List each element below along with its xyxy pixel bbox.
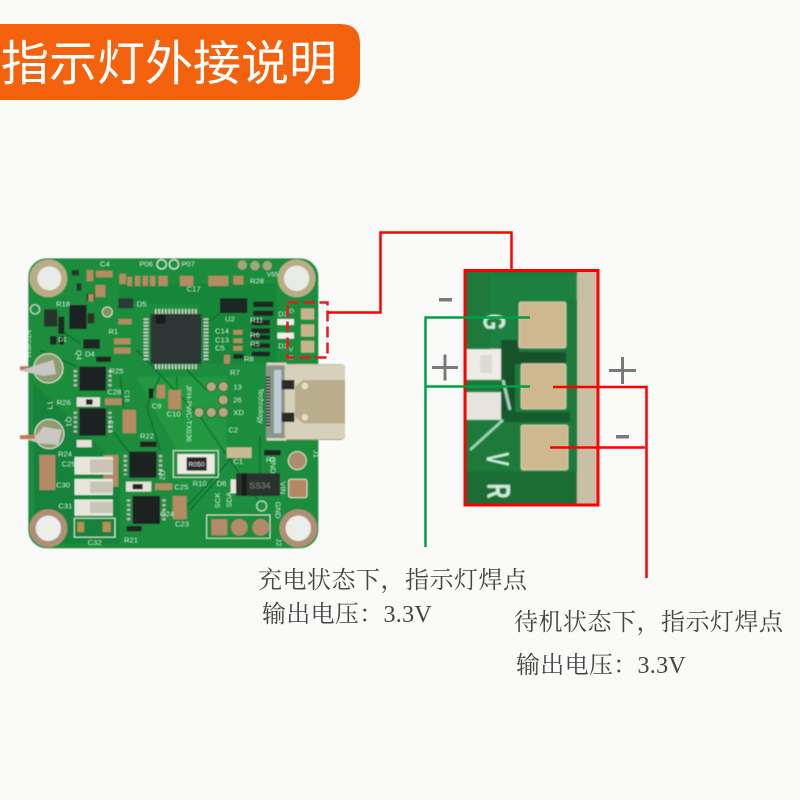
silkscreen labels: C31 xyxy=(58,501,72,510)
silkscreen labels xyxy=(25,260,320,547)
silkscreen labels: D2 xyxy=(278,341,288,350)
silkscreen labels: R6 xyxy=(250,330,260,339)
red standby leader lines xyxy=(550,387,646,578)
title banner xyxy=(0,24,360,100)
silkscreen labels: C10 xyxy=(167,410,181,419)
resistors xyxy=(77,397,151,492)
silkscreen labels: SCK xyxy=(213,492,222,508)
silkscreen labels: C24 xyxy=(160,510,175,519)
silkscreen labels: C4 xyxy=(100,260,111,269)
polarity minus left xyxy=(439,298,452,302)
caption: charging state xyxy=(258,567,528,628)
dashed selection box xyxy=(288,302,328,358)
main MCU chip xyxy=(151,314,201,364)
silkscreen labels: C23 xyxy=(175,520,189,529)
title banner: 指示灯外接说明 xyxy=(1,38,337,91)
red connector to detail xyxy=(328,232,512,312)
silkscreen labels: NTCIR34 xyxy=(25,330,32,358)
inductor pads xyxy=(34,354,63,383)
silkscreen labels: D4 xyxy=(85,350,96,359)
capacitor pads lower left xyxy=(39,455,55,490)
polarity plus left xyxy=(432,354,458,380)
silkscreen labels: D6 xyxy=(217,479,226,488)
USB Type-C connector xyxy=(267,364,345,440)
silkscreen labels: J1 xyxy=(311,450,320,458)
silkscreen labels: C16 xyxy=(123,390,130,402)
silkscreen labels: C25 xyxy=(174,482,188,491)
silkscreen labels: XD xyxy=(233,408,244,417)
silkscreen labels: Technology xyxy=(256,388,263,424)
through-hole pads xyxy=(194,382,228,417)
polarity minus right xyxy=(616,435,629,438)
silkscreen labels: R21 xyxy=(124,536,138,545)
silkscreen labels: C28 xyxy=(107,388,121,397)
silkscreen labels: R26 xyxy=(57,398,71,407)
solder pad: G xyxy=(519,302,566,348)
silkscreen labels: R1 xyxy=(266,455,276,464)
caption: standby state xyxy=(514,609,784,679)
caption: charging state: 充电状态下，指示灯焊点 xyxy=(258,567,528,594)
silkscreen labels: C30 xyxy=(56,480,70,489)
LED solder pads on board xyxy=(301,308,314,320)
silkscreen labels: GND xyxy=(269,457,278,474)
polarity plus right xyxy=(609,357,636,384)
silkscreen labels: C2 xyxy=(228,426,238,435)
wire: lead 1 xyxy=(20,361,43,374)
silkscreen lines xyxy=(470,380,510,450)
red detail frame xyxy=(465,270,598,505)
silkscreen labels: R18 xyxy=(56,300,70,309)
silkscreen labels: R25 xyxy=(109,366,123,375)
solder pad: V xyxy=(521,364,566,409)
green charging leader lines xyxy=(426,318,530,547)
silkscreen labels: C1 xyxy=(233,457,243,466)
silkscreen labels: D3 xyxy=(278,310,288,319)
silkscreen labels: JFH-PWC-TX036 xyxy=(185,385,194,442)
silkscreen labels: C27 xyxy=(106,420,113,432)
silkscreen labels: R xyxy=(289,355,294,362)
silkscreen labels: C17 xyxy=(187,285,201,294)
MOSFET chips xyxy=(79,367,106,391)
silkscreen labels: Q4 xyxy=(75,350,84,361)
silkscreen labels: J2 xyxy=(275,538,284,546)
silkscreen labels: D1 xyxy=(58,337,67,344)
caption: standby state: 输出电压：3.3V xyxy=(516,652,686,679)
silkscreen labels: C14 xyxy=(215,326,230,335)
silkscreen labels: 26 xyxy=(233,396,242,405)
silkscreen labels: R10 xyxy=(193,479,207,488)
silkscreen labels: D5 xyxy=(137,300,146,309)
small resistor array xyxy=(252,302,273,356)
silkscreen labels: V xyxy=(289,347,294,354)
silkscreen labels: L1 xyxy=(46,401,55,409)
circuit board photo: SS34 xyxy=(249,481,271,491)
silkscreen labels: C9 xyxy=(152,401,161,410)
silkscreen labels: C13 xyxy=(215,335,229,344)
silkscreen labels: 13 xyxy=(233,382,242,391)
silkscreen labels: R11 xyxy=(250,316,263,325)
silkscreen letters: R xyxy=(481,483,518,499)
schottky diode SS34 xyxy=(231,479,241,493)
silkscreen labels: R8 xyxy=(244,355,254,364)
circuit board photo: R050 xyxy=(189,462,205,469)
caption: charging state: 输出电压：3.3V xyxy=(262,601,432,628)
silkscreen labels: V55 xyxy=(267,272,279,279)
silkscreen labels: C29 xyxy=(62,460,76,469)
silkscreen letters: G xyxy=(476,314,512,330)
silkscreen labels: U2 xyxy=(225,315,235,324)
connector J2 pads xyxy=(207,515,270,538)
silkscreen labels: G xyxy=(288,308,295,314)
silkscreen labels: R5 xyxy=(250,340,260,349)
silkscreen labels: R7 xyxy=(230,368,240,377)
silkscreen labels: Q1 xyxy=(65,417,74,427)
silkscreen labels: R1 xyxy=(108,327,118,336)
silkscreen letters xyxy=(476,314,518,499)
silkscreen labels: R24 xyxy=(58,450,73,459)
silkscreen letters: V xyxy=(480,452,517,466)
current sense resistor R050 xyxy=(173,451,218,477)
connector J1 pads xyxy=(288,452,306,470)
circuit board photo xyxy=(20,258,345,548)
silkscreen labels: P06 xyxy=(139,260,153,269)
solder pad: R xyxy=(521,425,568,470)
silkscreen labels: P07 xyxy=(181,260,195,269)
silkscreen labels: Q2 xyxy=(158,470,167,480)
silkscreen labels: R22 xyxy=(140,431,154,440)
silkscreen labels: R28 xyxy=(250,276,264,285)
caption: standby state: 待机状态下，指示灯焊点 xyxy=(514,609,784,636)
capacitors top row xyxy=(87,270,252,519)
silkscreen labels: C32 xyxy=(88,538,102,547)
corner mounting holes xyxy=(29,259,67,297)
silkscreen labels: GND xyxy=(274,502,283,519)
silkscreen labels: SDA xyxy=(225,491,234,508)
zoomed board detail xyxy=(465,271,598,505)
silkscreen labels: C5 xyxy=(215,344,225,353)
silkscreen labels: VIN xyxy=(279,482,288,494)
dark copper band between pads xyxy=(466,340,566,420)
LED components xyxy=(466,349,501,380)
